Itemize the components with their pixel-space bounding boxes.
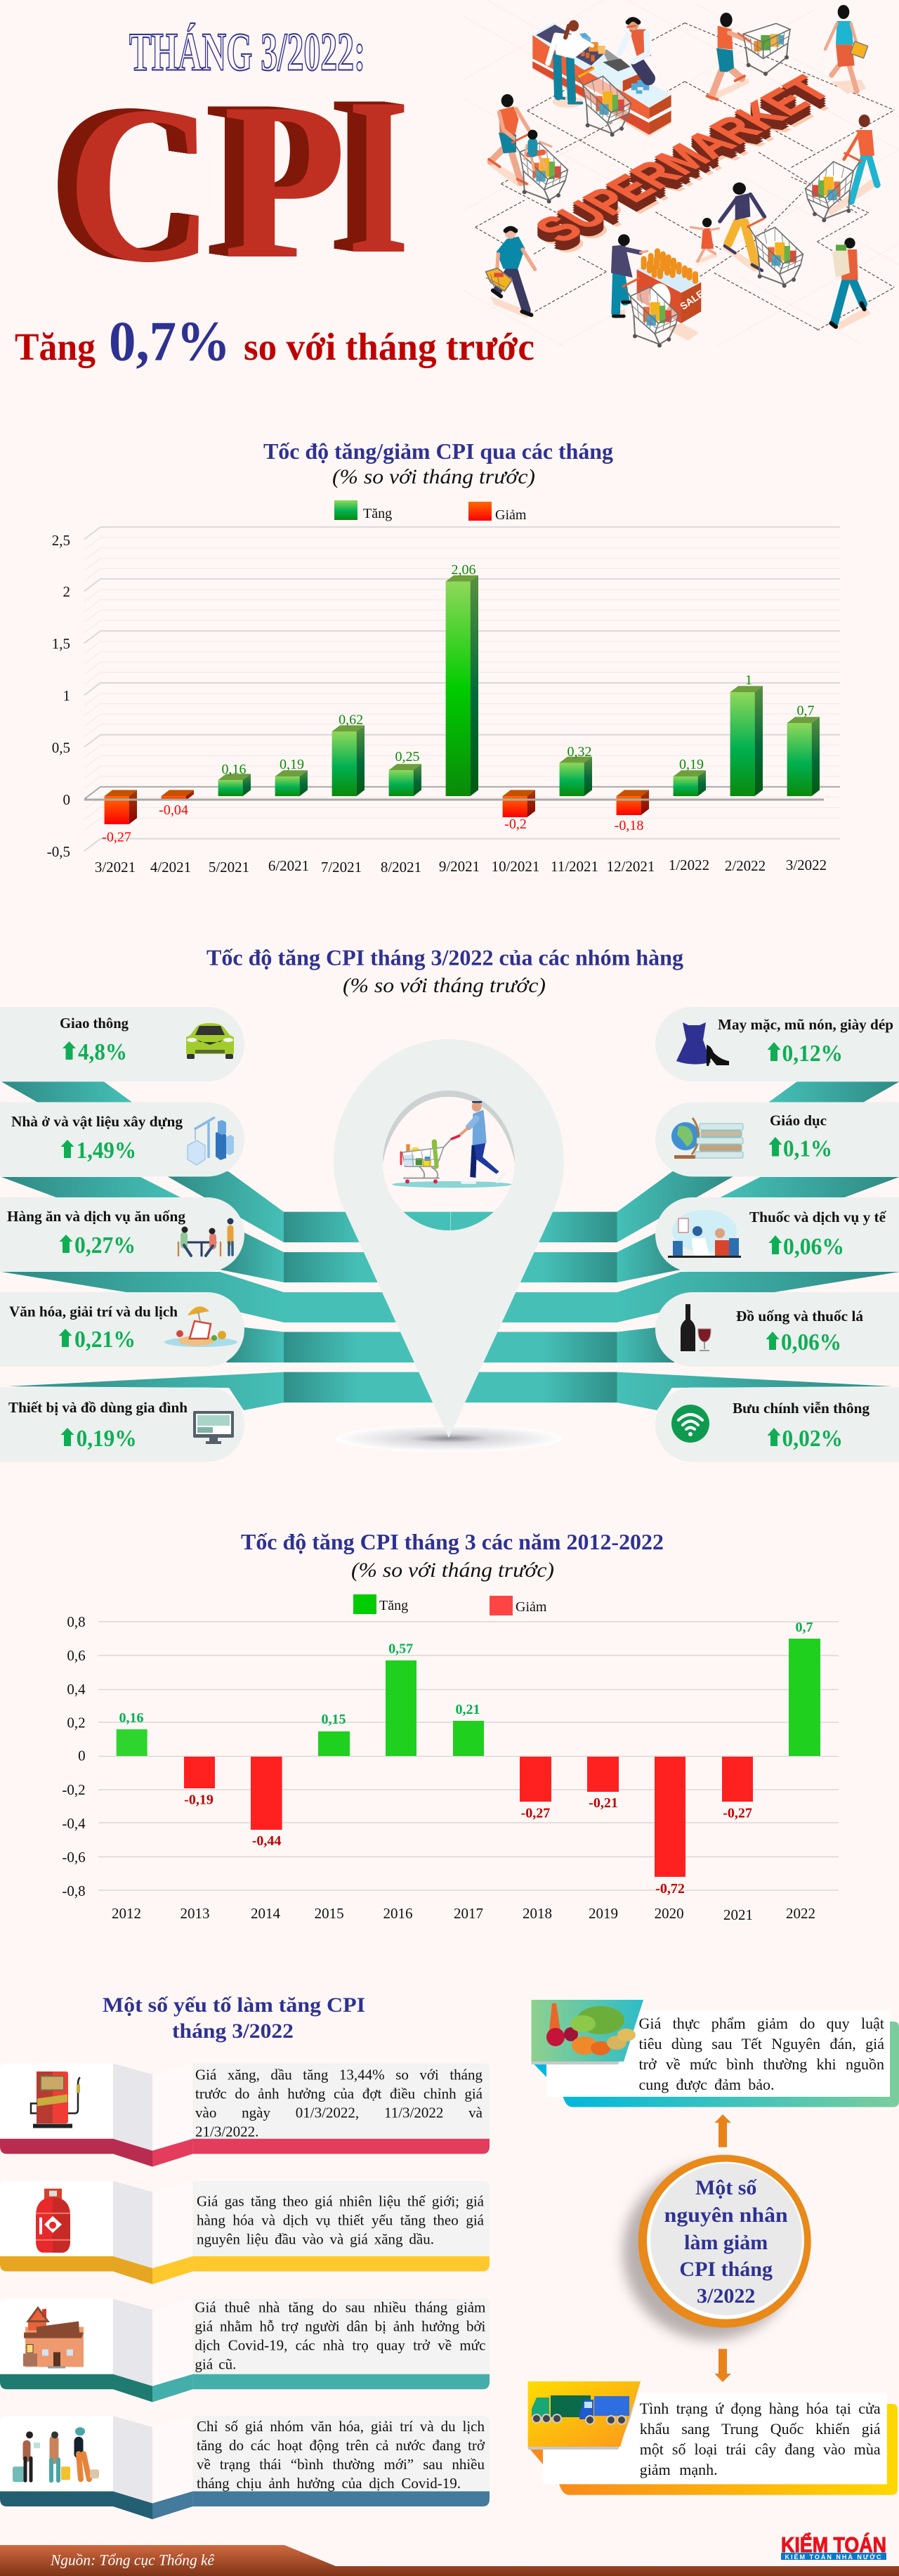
- panel: Thuốc và dịch vụ y tế: Thuốc và dịch vụ y tế: [749, 1209, 887, 1225]
- bar 7/2021: 0,62: [339, 713, 363, 728]
- top cart: [737, 23, 790, 76]
- text: food prices: cung được đảm bảo.: [639, 2076, 774, 2093]
- x axis labels: 12/2021: [607, 858, 655, 875]
- header: CPI 3D lettering: P: [216, 56, 339, 304]
- x axis labels: 4/2021: [150, 859, 191, 876]
- section 1 heading: [263, 438, 613, 488]
- icon: doctor and patient: [668, 1210, 741, 1258]
- icon: beach: [164, 1306, 237, 1347]
- bar 8/2021: 0,25: [395, 749, 420, 765]
- header: CPI 3D lettering: I: [343, 51, 405, 300]
- text: rent: giá nhằm hỗ trợ người dân bị ảnh hưởng bởi: [195, 2317, 485, 2334]
- bar 2012: 0,16: [119, 1710, 143, 1726]
- row: gas: [0, 2181, 490, 2284]
- x axis labels: 2016: [383, 1905, 413, 1922]
- bar 2/2022: 1: [745, 672, 752, 688]
- y axis labels: 2,5: [52, 532, 70, 549]
- panel: Giao thông: Giao thông: [60, 1015, 129, 1032]
- child in cart: [525, 130, 551, 170]
- header: CPI 3D lettering: I: [340, 51, 402, 299]
- headline: Tăng 0,7% so với tháng trước: Tăng: [15, 325, 96, 368]
- bar 2017: [453, 1702, 484, 1756]
- sale display crate: [637, 251, 706, 323]
- header: CPI 3D lettering: C: [62, 60, 209, 308]
- row: culture and tourism: [0, 2416, 490, 2519]
- panel: Bưu chính viễn thông: [655, 1387, 899, 1462]
- legend: chart 3: Tăng: [379, 1598, 408, 1613]
- logo: Kiểm Toán: KIỂM TOÁN NHÀ NƯỚC: [785, 2553, 882, 2561]
- panel: Thuốc và dịch vụ y tế: [655, 1197, 899, 1272]
- text: export congestion: giảm mạnh.: [640, 2461, 718, 2478]
- bar 2016: 0,57: [388, 1641, 413, 1657]
- panel: May mặc, mũ nón, giày dép: May mặc, mũ nón, giày dép: [718, 1016, 893, 1033]
- header: CPI 3D lettering: I: [348, 52, 409, 301]
- text: culture and tourism: [197, 2417, 488, 2494]
- checkout counter: [532, 22, 671, 135]
- icon: gas cylinder: [36, 2189, 70, 2253]
- x axis labels: 8/2021: [381, 859, 421, 876]
- y axis labels: 2: [63, 583, 70, 600]
- x axis labels: 5/2021: [209, 859, 249, 876]
- y axis labels: 1: [63, 687, 70, 704]
- text: gas: nguyên liệu đầu vào và giá xăng dầu.: [197, 2230, 434, 2247]
- bar 8/2021: [389, 749, 421, 796]
- icon: dress and heel: [676, 1022, 729, 1066]
- person: woman with child and cart: [489, 94, 530, 184]
- person: man in suit: [611, 234, 648, 316]
- header: CPI 3D lettering: C: [53, 58, 201, 307]
- x axis labels: 2014: [251, 1905, 281, 1922]
- section 2 heading: Tốc độ tăng CPI tháng 3/2022 của các nhóm hàng: [206, 945, 683, 970]
- panel: Nhà ở và vật liệu xây dựng: [0, 1102, 244, 1176]
- person: woman with yellow trousers: [720, 183, 764, 271]
- text: culture and tourism: về trạng thái “bình thường mới” sau nhiều: [197, 2456, 485, 2473]
- text: food prices: [639, 2013, 886, 2096]
- panel: Văn hóa, giải trí và du lịch: Văn hóa, giải trí và du lịch: [9, 1303, 178, 1320]
- value: 0,27%: 0,27%: [74, 1232, 136, 1258]
- panel: Đồ uống và thuốc lá: Đồ uống và thuốc lá: [736, 1308, 864, 1325]
- x axis labels: 7/2021: [321, 859, 362, 876]
- text: rent: [195, 2298, 488, 2375]
- bar 2020: [655, 1757, 685, 1897]
- center circle: reasons lowering CPI: nguyên nhân: [664, 2204, 788, 2227]
- bar 2013: -0,19: [184, 1793, 214, 1808]
- icon: travellers: [13, 2427, 99, 2482]
- icon: globe and books: [671, 1118, 743, 1159]
- panel: Văn hóa, giải trí và du lịch: [0, 1292, 244, 1367]
- header: CPI 3D lettering: P: [210, 55, 333, 304]
- center circle: reasons lowering CPI: Một số: [695, 2176, 757, 2199]
- text: export congestion: một số loại trái cây đang vào mùa: [640, 2440, 881, 2458]
- bar 2016: [386, 1641, 416, 1756]
- bar 2019: [587, 1757, 619, 1811]
- header title: THÁNG 3/2022: THÁNG 3/2022:: [129, 21, 365, 82]
- icon: vegetables: [546, 2003, 636, 2055]
- footer bar with source: [0, 2545, 899, 2576]
- person: man with basket: [493, 228, 535, 315]
- x axis labels: 2021: [723, 1906, 753, 1923]
- bar 3/2021: -0,27: [102, 830, 131, 845]
- y axis labels: -0,8: [62, 1882, 86, 1899]
- legend: chart 1: Tăng: [363, 506, 392, 521]
- x axis labels: 2013: [180, 1905, 209, 1922]
- pin shadow: [336, 1425, 562, 1452]
- legend: chart 1: [334, 500, 527, 523]
- x axis labels: 2017: [454, 1905, 483, 1922]
- x axis labels: 6/2021: [268, 857, 309, 874]
- header: CPI 3D lettering: I: [332, 50, 393, 299]
- text: culture and tourism: Chỉ số giá nhóm văn hóa, giải trí và du lịch: [197, 2418, 485, 2435]
- bar 2014: -0,44: [252, 1833, 281, 1849]
- header: CPI 3D lettering: C: [56, 59, 204, 308]
- x axis labels: 2020: [655, 1905, 684, 1922]
- bar 2021: [722, 1757, 753, 1821]
- value: 1,49%: 1,49%: [77, 1138, 136, 1164]
- bar 2012: [117, 1710, 147, 1756]
- reason box: food prices: [531, 2000, 899, 2107]
- peach floor shadows: [487, 65, 878, 341]
- y axis labels: 0: [63, 791, 70, 808]
- icon: buildings: [188, 1117, 234, 1165]
- bar 11/2021: [560, 744, 592, 796]
- panel: Hàng ăn và dịch vụ ăn uống: [0, 1197, 244, 1272]
- bar 6/2021: 0,19: [280, 757, 304, 772]
- person: man with grocery bag: [831, 238, 865, 327]
- panel: Đồ uống và thuốc lá: [655, 1292, 899, 1367]
- headline: Tăng 0,7% so với tháng trước: [15, 311, 534, 372]
- center circle: reasons lowering CPI: [623, 2155, 811, 2340]
- y axis labels: -0,2: [62, 1781, 86, 1798]
- y axis labels: [47, 532, 70, 860]
- header: CPI 3D lettering: P: [213, 56, 336, 304]
- bar 4/2021: -0,04: [159, 802, 188, 818]
- text: petrol: vào ngày 01/3/2022, 11/3/2022 và: [195, 2104, 483, 2121]
- value: 0,06%: 0,06%: [783, 1234, 844, 1260]
- connector ribbons, right: [451, 1081, 899, 1410]
- header: CPI 3D lettering: I: [346, 52, 407, 301]
- panel: May mặc, mũ nón, giày dép: [655, 1007, 899, 1081]
- text: petrol: trước do ảnh hưởng của đợt điều chỉnh giá: [195, 2085, 483, 2102]
- section 1 subtitle: (% so với tháng trước): [332, 465, 535, 488]
- header: CPI 3D lettering: C: [51, 58, 198, 307]
- header: CPI 3D lettering: [48, 49, 409, 309]
- person: woman with cart, top: [707, 13, 750, 100]
- value: 0,12%: 0,12%: [782, 1041, 843, 1067]
- bar 5/2021: [218, 762, 251, 796]
- x axis labels: 2019: [589, 1905, 618, 1922]
- bar 10/2021: [503, 790, 535, 832]
- bar 5/2021: 0,16: [222, 762, 246, 777]
- person: cashier: [619, 19, 651, 79]
- bar 1/2022: [674, 757, 706, 796]
- person: woman with basket, top right: [825, 5, 868, 91]
- child in red dress: [690, 218, 718, 261]
- x axis labels: 2022: [786, 1905, 815, 1922]
- arrow up: [715, 2114, 731, 2147]
- header: CPI 3D lettering: P: [218, 56, 341, 305]
- icon: wine bottle and glass: [681, 1304, 711, 1351]
- bar 9/2021: [446, 562, 478, 796]
- y axis labels: 0,6: [67, 1647, 86, 1664]
- header: CPI 3D lettering: I: [337, 51, 399, 299]
- center circle: reasons lowering CPI: CPI tháng: [679, 2258, 773, 2281]
- icon: monitor: [193, 1411, 234, 1444]
- x axis labels: 9/2021: [439, 858, 480, 875]
- bar 4/2021: [159, 790, 194, 818]
- icon: wifi: [671, 1405, 709, 1443]
- text: export congestion: [640, 2398, 884, 2481]
- bar 2017: 0,21: [455, 1702, 480, 1717]
- text: petrol: Giá xăng, dầu tăng 13,44% so với tháng: [195, 2066, 483, 2083]
- panel: Giáo dục: [655, 1102, 899, 1176]
- header: CPI 3D lettering: C: [59, 59, 206, 308]
- x axis labels: 3/2022: [786, 857, 827, 873]
- y axis labels: 0,8: [67, 1613, 86, 1630]
- x axis labels: [112, 1905, 815, 1923]
- x axis labels: 2012: [112, 1905, 141, 1922]
- header: CPI 3D lettering: P: [204, 54, 327, 303]
- footer bar with source: Nguồn: Tổng cục Thống kê: [50, 2551, 214, 2569]
- bar 2021: -0,27: [723, 1806, 752, 1821]
- row: petrol: [0, 2063, 490, 2167]
- bar chart: March CPI 2012-2022: [62, 1613, 839, 1923]
- bar 2014: [251, 1757, 282, 1849]
- header: CPI 3D lettering: I: [334, 50, 396, 299]
- section 3 heading: Tốc độ tăng CPI tháng 3 các năm 2012-2022: [241, 1529, 664, 1554]
- bar 2015: 0,15: [322, 1712, 346, 1727]
- panel: Bưu chính viễn thông: Bưu chính viễn thông: [733, 1400, 870, 1417]
- bar 2020: -0,72: [655, 1881, 685, 1897]
- y axis labels: 0: [78, 1748, 86, 1764]
- y axis labels: -0,4: [62, 1815, 86, 1832]
- icon: fuel pump: [31, 2071, 80, 2128]
- text: gas: Giá gas tăng theo giá nhiên liệu thế giới; giá: [197, 2192, 484, 2209]
- bar 3/2022: [787, 703, 820, 796]
- icon: trucks: [532, 2395, 629, 2424]
- reason box: export congestion: [528, 2381, 898, 2495]
- x axis labels: 3/2021: [95, 859, 136, 876]
- header: CPI 3D lettering: P: [221, 56, 344, 305]
- y axis labels: 1,5: [52, 635, 70, 652]
- y axis labels: [62, 1613, 86, 1899]
- header: CPI 3D lettering: C: [67, 60, 214, 309]
- bar 12/2021: -0,18: [615, 818, 643, 833]
- icon: car: [186, 1023, 234, 1059]
- header: CPI 3D lettering: C: [48, 58, 195, 306]
- bar 2022: [789, 1620, 820, 1756]
- text: gas: [197, 2192, 488, 2251]
- text: petrol: 21/3/2022.: [195, 2123, 258, 2140]
- sale display crate: SALE: [678, 287, 706, 312]
- headline: Tăng 0,7% so với tháng trước: so với tháng trước: [244, 325, 534, 368]
- illustration: supermarket isometric scene: [464, 0, 899, 348]
- value: 0,19%: 0,19%: [77, 1426, 137, 1452]
- bar 1/2022: 0,19: [679, 757, 704, 772]
- text: food prices: Giá thực phẩm giảm do quy luật: [639, 2015, 884, 2032]
- y axis labels: -0,6: [62, 1849, 86, 1866]
- basket of man: [486, 268, 512, 291]
- section 4 heading: factors raising CPI: Một số yếu tố làm tăng CPI: [103, 1993, 365, 2017]
- shopper with cart in pin: [392, 1102, 511, 1188]
- bar 2015: [318, 1712, 350, 1756]
- panel: Thiết bị và đồ dùng gia đình: Thiết bị và đồ dùng gia đình: [8, 1399, 188, 1416]
- bar 12/2021: [615, 790, 649, 833]
- value: 0,06%: 0,06%: [781, 1329, 841, 1355]
- text: culture and tourism: tăng do các hoạt động trên cả nước đang trở: [197, 2437, 485, 2454]
- value: 0,1%: 0,1%: [783, 1136, 832, 1162]
- panel: Giao thông: [0, 1007, 244, 1081]
- section 3 heading: [241, 1529, 664, 1582]
- center circle: reasons lowering CPI: làm giảm: [684, 2231, 768, 2254]
- header: CPI 3D lettering: I: [329, 49, 391, 298]
- bar chart: monthly CPI: [47, 527, 840, 876]
- x axis labels: 1/2022: [669, 857, 709, 873]
- text: rent: giá cũ.: [195, 2355, 236, 2372]
- value: 0,02%: 0,02%: [782, 1426, 843, 1452]
- legend: chart 3: [353, 1594, 547, 1615]
- header: CPI 3D lettering: P: [223, 57, 346, 306]
- bar 2013: [184, 1757, 215, 1808]
- text: gas: hàng hóa và dịch vụ thiết yếu tăng theo giá: [197, 2211, 484, 2228]
- text: export congestion: Tình trạng ứ đọng hàng hóa tại cửa: [640, 2400, 881, 2417]
- x axis labels: 2018: [523, 1905, 552, 1922]
- value: 0,21%: 0,21%: [74, 1327, 136, 1353]
- person: woman with cart right: [844, 115, 877, 202]
- panel: Giáo dục: Giáo dục: [770, 1112, 827, 1129]
- y axis labels: -0,5: [47, 843, 70, 860]
- bar 2019: -0,21: [589, 1795, 618, 1811]
- text: export congestion: khẩu sang Trung Quốc khiến giá: [640, 2420, 881, 2438]
- text: petrol: [195, 2065, 487, 2142]
- section 2 subtitle: (% so với tháng trước): [343, 974, 546, 997]
- section 3 subtitle: (% so với tháng trước): [351, 1559, 554, 1582]
- bar 2/2022: [730, 672, 763, 796]
- panel: Nhà ở và vật liệu xây dựng: Nhà ở và vật liệu xây dựng: [11, 1113, 183, 1130]
- y axis labels: 0,4: [67, 1681, 86, 1698]
- text: rent: dịch Covid-19, các nhà trọ quay trở về mức: [195, 2336, 485, 2353]
- bar 3/2021: [102, 790, 137, 845]
- y axis labels: 0,5: [52, 739, 70, 756]
- bar 6/2021: [275, 757, 308, 796]
- icon: dining people: [178, 1218, 233, 1256]
- row: rent: [0, 2298, 490, 2402]
- value: 4,8%: 4,8%: [78, 1039, 127, 1065]
- legend: chart 1: Giảm: [495, 507, 527, 523]
- person: customer at counter: [548, 20, 592, 103]
- header: CPI 3D lettering: P: [207, 55, 330, 304]
- y axis labels: 0,2: [67, 1715, 86, 1731]
- connector ribbons, left: [1, 1081, 450, 1410]
- headline: Tăng 0,7% so với tháng trước: 0,7%: [109, 311, 230, 372]
- bar 10/2021: -0,2: [504, 817, 527, 832]
- x axis labels: 10/2021: [492, 858, 539, 875]
- bar 3/2022: 0,7: [796, 703, 815, 719]
- panel: Hàng ăn và dịch vụ ăn uống: Hàng ăn và dịch vụ ăn uống: [7, 1208, 185, 1225]
- section 4 heading: factors raising CPI: [103, 1993, 365, 2043]
- x axis labels: [95, 857, 827, 876]
- legend: chart 3: Giảm: [516, 1599, 547, 1615]
- bar 2018: -0,27: [521, 1806, 550, 1821]
- bar 11/2021: 0,32: [567, 744, 591, 760]
- section 1 heading: Tốc độ tăng/giảm CPI qua các tháng: [263, 438, 613, 464]
- text: rent: Giá thuê nhà tăng do sau nhiều tháng giảm: [195, 2298, 485, 2315]
- text: food prices: tiêu dùng sau Tết Nguyên đán, giá: [639, 2035, 884, 2053]
- center circle: reasons lowering CPI: 3/2022: [697, 2284, 755, 2308]
- text: culture and tourism: tháng chịu ảnh hưởng của dịch Covid-19.: [197, 2475, 461, 2492]
- location pin: [334, 1039, 564, 1438]
- bar 7/2021: [332, 713, 365, 796]
- x axis labels: 11/2021: [551, 858, 598, 875]
- bar 9/2021: 2,06: [451, 562, 476, 578]
- header: CPI 3D lettering: C: [65, 60, 212, 309]
- icon: house: [23, 2308, 84, 2368]
- x axis labels: 2/2022: [725, 857, 766, 874]
- bar 2022: 0,7: [795, 1620, 813, 1635]
- arrow down: [715, 2349, 731, 2382]
- x axis labels: 2015: [315, 1905, 344, 1922]
- section 2 heading: [206, 945, 683, 997]
- section 4 heading: factors raising CPI: tháng 3/2022: [172, 2019, 294, 2043]
- text: food prices: trở về mức bình thường khi nguồn: [639, 2055, 884, 2073]
- panel: Thiết bị và đồ dùng gia đình: [0, 1387, 244, 1462]
- bar 2018: [520, 1757, 551, 1821]
